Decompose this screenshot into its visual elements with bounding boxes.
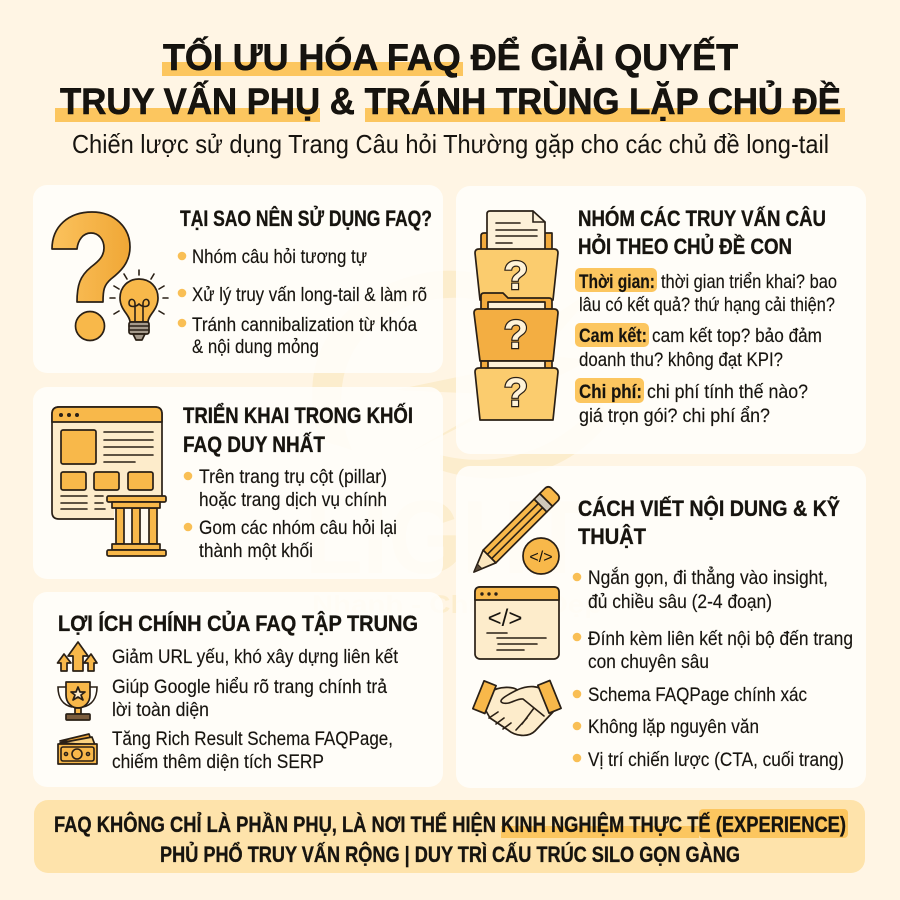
heading: LỢI ÍCH CHÍNH CỦA FAQ TẬP TRUNG bbox=[58, 611, 418, 636]
bullet list: đủ chiều sâu (2-4 đoạn) bbox=[588, 591, 772, 613]
icon: pencil and code badge: </> bbox=[529, 549, 553, 566]
bullet list bbox=[184, 466, 397, 562]
bottom banner bbox=[34, 800, 865, 873]
bullet list: Không lặp nguyên văn bbox=[588, 716, 759, 738]
heading bbox=[578, 496, 840, 549]
bullet list: Vị trí chiến lược (CTA, cuối trang) bbox=[588, 749, 844, 771]
benefit text 2: lời toàn diện bbox=[112, 699, 209, 721]
bullet list: hoặc trang dịch vụ chính bbox=[199, 489, 387, 511]
panel: deploy in one FAQ block bbox=[33, 387, 443, 579]
icon: question mark and light bulb bbox=[52, 212, 168, 340]
benefit text 2 bbox=[112, 676, 387, 721]
title: TRUY VẤN PHỤ & TRÁNH TRÙNG LẶP CHỦ ĐỀ bbox=[60, 80, 841, 122]
title: TỐI ƯU HÓA FAQ ĐỂ GIẢI QUYẾT bbox=[163, 36, 738, 78]
heading: CÁCH VIẾT NỘI DUNG & KỸ bbox=[578, 496, 840, 521]
bullet list: con chuyên sâu bbox=[588, 651, 709, 673]
heading: TRIỂN KHAI TRONG KHỐI bbox=[183, 402, 413, 428]
heading: NHÓM CÁC TRUY VẤN CÂU bbox=[578, 206, 826, 231]
watermark logo bbox=[305, 271, 610, 619]
bullet list: Tránh cannibalization từ khóa bbox=[192, 314, 417, 336]
icon: up arrows bbox=[58, 642, 97, 671]
watermark logo: LIGHT bbox=[305, 480, 587, 596]
bullet list bbox=[573, 565, 853, 771]
item: time: thời gian triển khai? bao bbox=[661, 271, 837, 293]
benefit text 3: chiếm thêm diện tích SERP bbox=[112, 751, 324, 773]
benefit text 2: Giúp Google hiểu rõ trang chính trả bbox=[112, 676, 387, 698]
benefit text 3: Tăng Rich Result Schema FAQPage, bbox=[112, 728, 393, 750]
heading bbox=[578, 206, 826, 259]
item: cost bbox=[575, 378, 808, 427]
panel: query groups by subtopic bbox=[456, 186, 866, 454]
watermark logo: Nhanh - Chuẩn - Đẹp bbox=[312, 591, 602, 619]
item: time: lâu có kết quả? thứ hạng cải thiện? bbox=[579, 294, 835, 316]
item: cost: giá trọn gói? chi phí ẩn? bbox=[579, 405, 770, 427]
item: commitment: Cam kết: bbox=[579, 325, 647, 347]
icon: code window: </> bbox=[488, 605, 522, 632]
item: cost: chi phí tính thế nào? bbox=[647, 381, 808, 403]
icon: money bbox=[58, 734, 97, 764]
item: commitment: doanh thu? không đạt KPI? bbox=[579, 349, 783, 371]
bullet list: thành một khối bbox=[199, 540, 313, 562]
benefit text 1: Giảm URL yếu, khó xây dựng liên kết bbox=[112, 646, 399, 668]
icon: trophy bbox=[58, 682, 97, 720]
icon: web page and pillar bbox=[52, 407, 166, 556]
item: time: Thời gian: bbox=[579, 271, 655, 293]
icon: handshake bbox=[473, 680, 561, 735]
bullet list: Schema FAQPage chính xác bbox=[588, 684, 807, 706]
heading: THUẬT bbox=[578, 524, 647, 549]
icon: stacked folders with question marks: ? bbox=[504, 254, 528, 298]
heading: HỎI THEO CHỦ ĐỀ CON bbox=[578, 234, 792, 259]
bullet list: Đính kèm liên kết nội bộ đến trang bbox=[588, 628, 853, 650]
heading: FAQ DUY NHẤT bbox=[183, 432, 325, 457]
icon: stacked folders with question marks bbox=[474, 211, 558, 420]
bullet list: Ngắn gọn, đi thẳng vào insight, bbox=[588, 565, 828, 589]
bullet list: Nhóm câu hỏi tương tự bbox=[192, 246, 367, 268]
bullet list: Trên trang trụ cột (pillar) bbox=[199, 466, 387, 488]
item: commitment bbox=[575, 323, 822, 371]
heading bbox=[183, 402, 413, 457]
bottom banner: PHỦ PHỔ TRUY VẤN RỘNG | DUY TRÌ CẤU TRÚC SILO GỌN GÀNG bbox=[160, 842, 740, 867]
bullet list: Gom các nhóm câu hỏi lại bbox=[199, 517, 397, 539]
item: time bbox=[575, 268, 837, 316]
icon: stacked folders with question marks: ? bbox=[504, 371, 528, 415]
item: cost: Chi phí: bbox=[579, 381, 642, 403]
icon: code window bbox=[475, 587, 559, 659]
bullet list: & nội dung mỏng bbox=[192, 336, 319, 358]
subtitle: Chiến lược sử dụng Trang Câu hỏi Thường gặp cho các chủ đề long-tail bbox=[72, 129, 829, 159]
item: commitment: cam kết top? bảo đảm bbox=[652, 325, 822, 347]
panel: writing and technique bbox=[456, 466, 866, 788]
icon: pencil and code badge bbox=[468, 485, 561, 578]
bullet list: Xử lý truy vấn long-tail & làm rõ bbox=[192, 284, 427, 306]
icon: stacked folders with question marks: ? bbox=[504, 313, 528, 357]
benefit text 3 bbox=[112, 728, 393, 773]
title bbox=[55, 36, 845, 122]
heading: TẠI SAO NÊN SỬ DỤNG FAQ? bbox=[180, 206, 432, 231]
panel: main benefits bbox=[33, 592, 443, 787]
panel: why use FAQ bbox=[33, 185, 443, 373]
bullet list bbox=[178, 246, 427, 358]
